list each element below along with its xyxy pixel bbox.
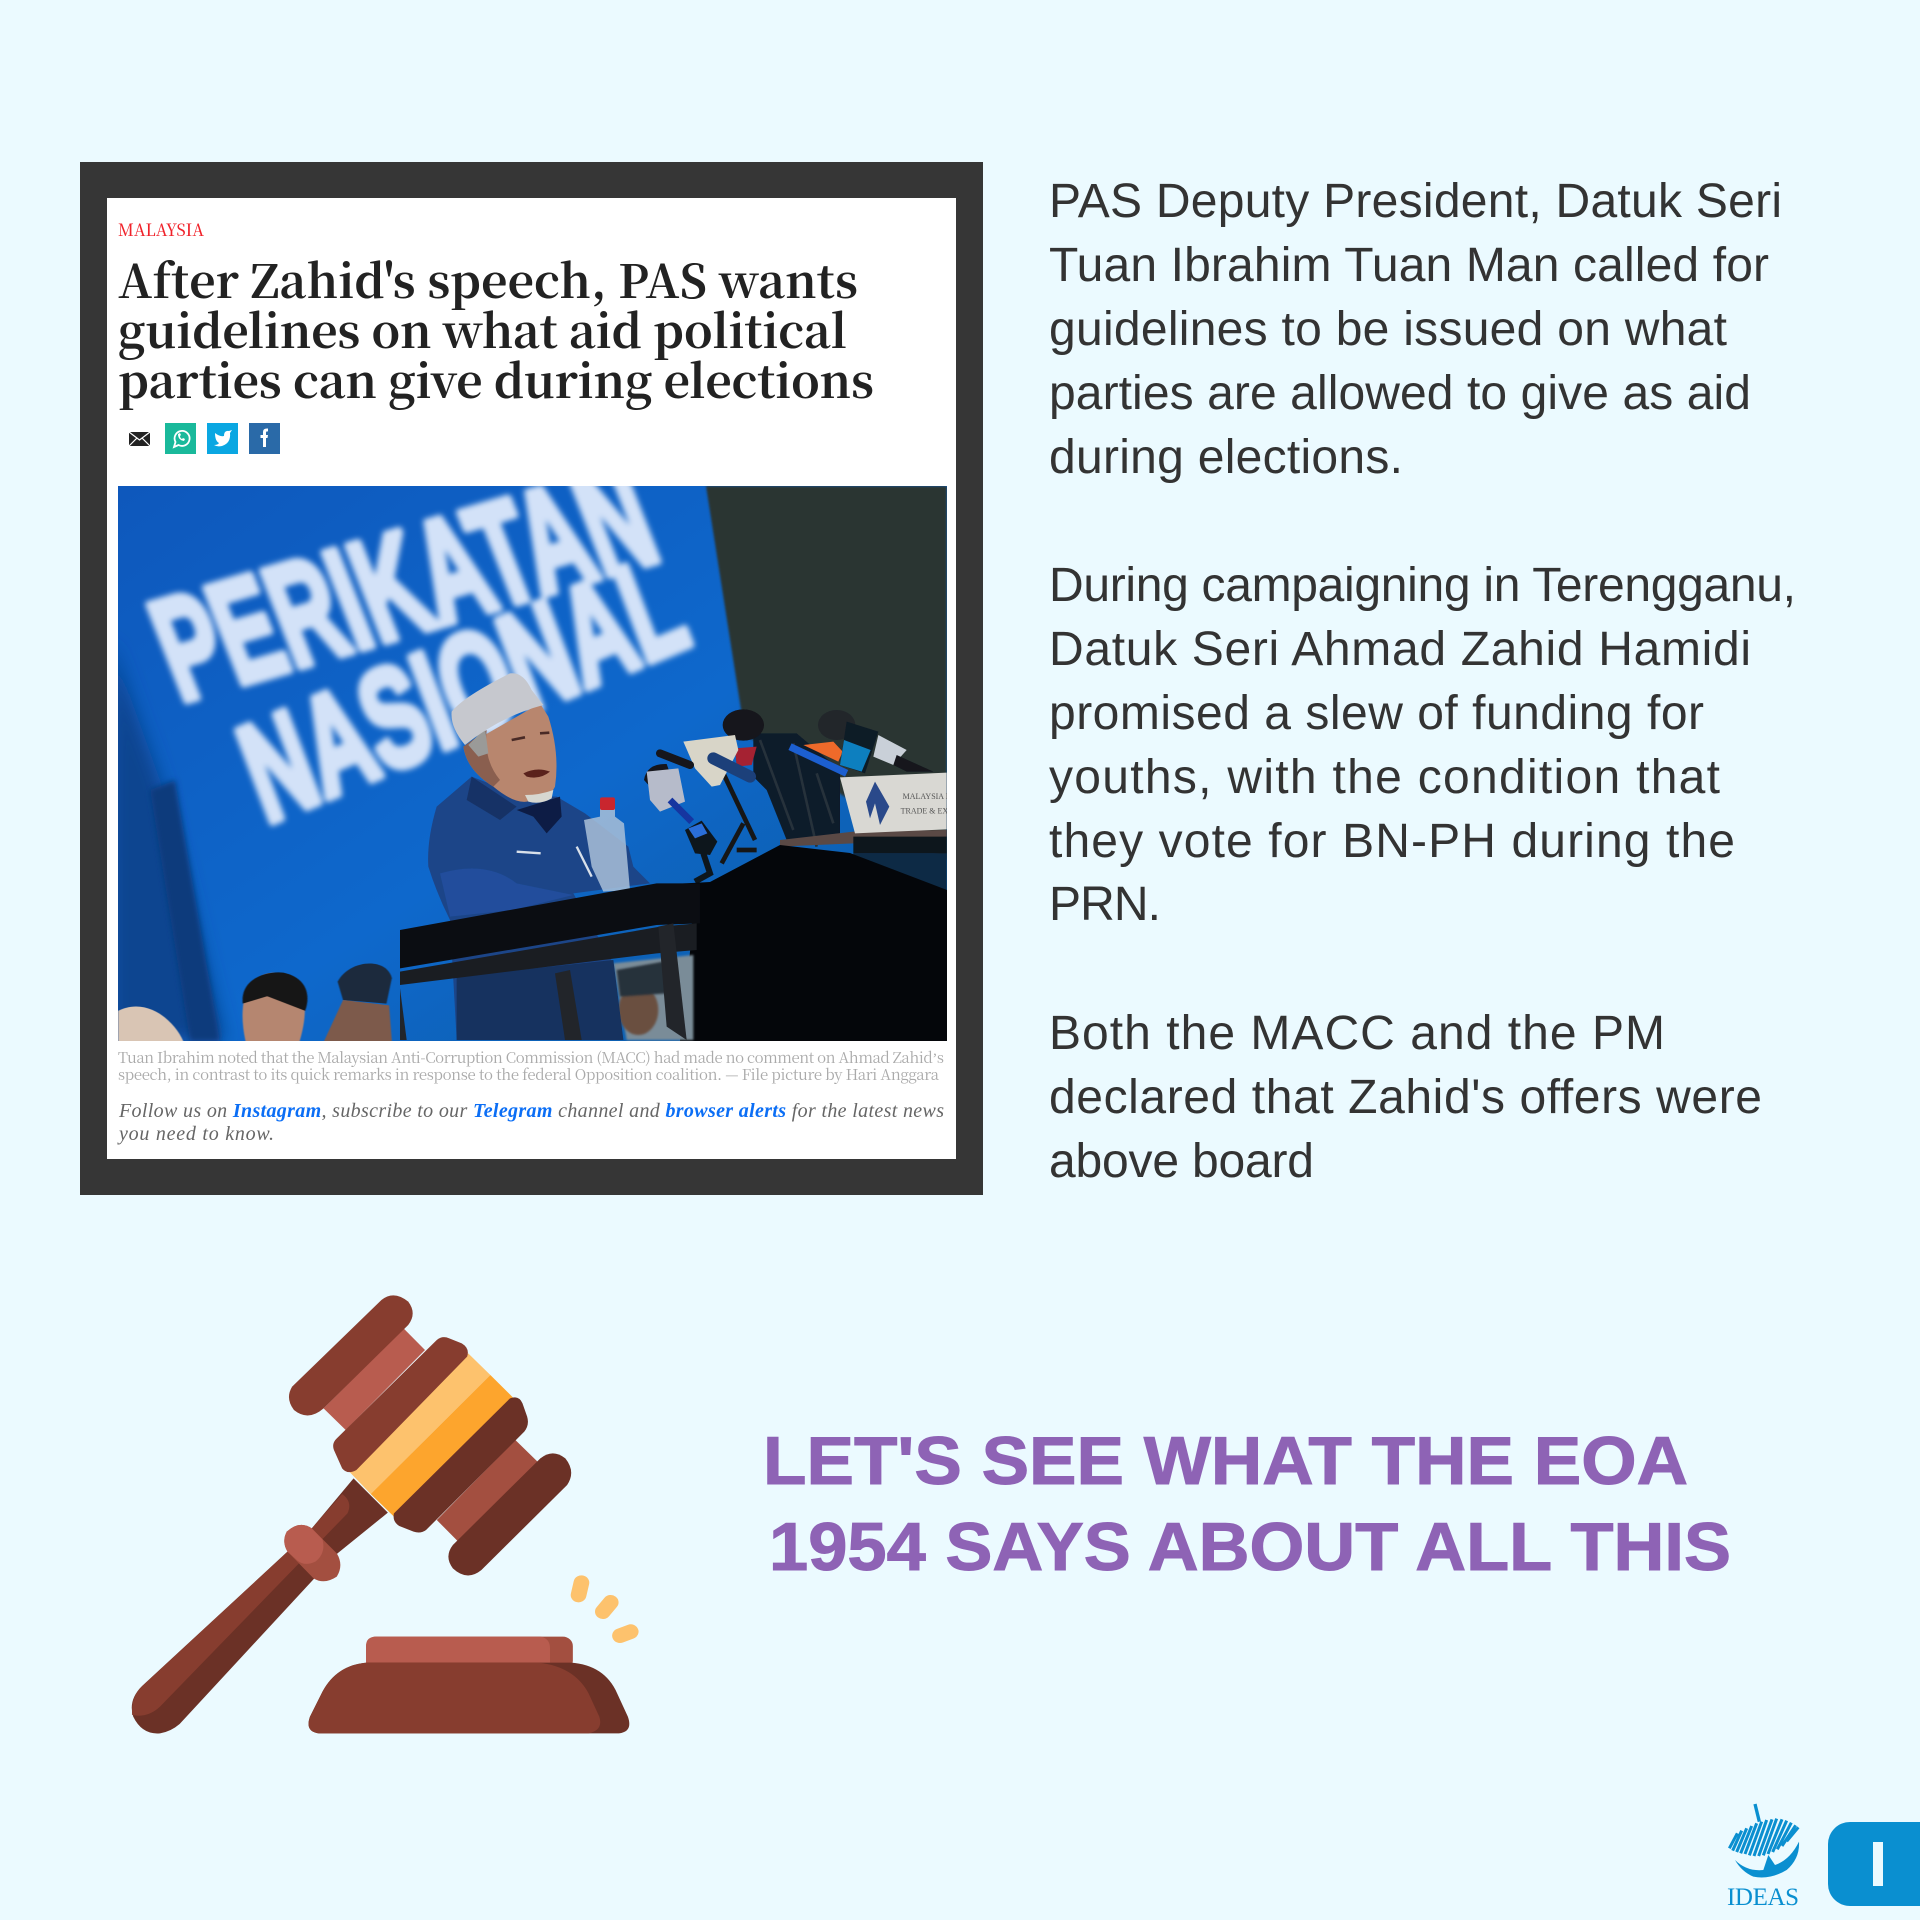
text block: Zahid campaign promises: they vote for BN-PH during the <box>1049 815 1735 868</box>
sound block <box>309 1637 629 1733</box>
text block: Tuan Ibrahim call for guidelines: during elections. <box>1049 431 1403 484</box>
microphones and name sign <box>644 709 970 893</box>
lectern table <box>400 883 700 1040</box>
panel: news article screenshot <box>80 162 983 1195</box>
article headline: guidelines on what aid political <box>118 296 847 362</box>
text block: Zahid campaign promises: During campaigning in Terengganu, <box>1049 559 1796 612</box>
call to action heading <box>763 1423 1731 1585</box>
follow us note <box>117 1100 944 1145</box>
microphones and name sign: TRADE & EXHIBIT <box>901 806 970 815</box>
text block: MACC and PM response: above board <box>1049 1135 1314 1188</box>
IDEAS logo <box>1727 1804 1799 1911</box>
call to action heading: LET'S SEE WHAT THE EOA <box>763 1423 1688 1499</box>
article category: MALAYSIA <box>118 216 205 241</box>
follow us note: you need to know. <box>117 1123 274 1145</box>
stage backdrop wording <box>141 486 698 830</box>
gavel head <box>289 1295 571 1575</box>
text block: MACC and PM response: declared that Zahid's offers were <box>1049 1071 1762 1124</box>
share icons <box>129 423 280 454</box>
text block: Zahid campaign promises <box>1049 559 1796 931</box>
handle collar <box>284 1525 340 1581</box>
text block: Zahid campaign promises: Datuk Seri Ahmad Zahid Hamidi <box>1049 623 1751 676</box>
speaker <box>428 673 650 1040</box>
article photo: speaker at podium <box>118 486 947 1041</box>
article headline: After Zahid's speech, PAS wants <box>118 246 858 312</box>
microphones and name sign: MALAYSIA INTER <box>903 792 970 801</box>
podium black front <box>655 845 947 1041</box>
call to action heading: 1954 SAYS ABOUT ALL THIS <box>769 1509 1731 1585</box>
photo caption: Tuan Ibrahim noted that the Malaysian Anti-Corruption Commission (MACC) had made no comment on Ahmad Zahid’s <box>118 1047 944 1068</box>
text block: Zahid campaign promises: youths, with the condition that <box>1049 751 1720 804</box>
article headline <box>118 246 874 412</box>
logo wordmark: IDEAS <box>1727 1884 1799 1911</box>
stage backdrop wording: PERIKATAN <box>131 435 676 732</box>
text block: Tuan Ibrahim call for guidelines: guidelines to be issued on what <box>1049 303 1727 356</box>
text block: Zahid campaign promises: promised a slew of funding for <box>1049 687 1704 740</box>
text block: Tuan Ibrahim call for guidelines: Tuan Ibrahim Tuan Man called for <box>1049 239 1769 292</box>
article headline: parties can give during elections <box>118 346 874 412</box>
audience heads <box>118 963 392 1041</box>
photo caption: speech, in contrast to its quick remarks in response to the federal Opposition coalition. — File picture by Hari Anggara <box>118 1064 940 1085</box>
text block: Tuan Ibrahim call for guidelines <box>1049 175 1782 484</box>
speaker and lectern <box>400 673 700 1040</box>
text block: Tuan Ibrahim call for guidelines: parties are allowed to give as aid <box>1049 367 1751 420</box>
photo caption <box>118 1047 944 1085</box>
text block: MACC and PM response: Both the MACC and the PM <box>1049 1007 1665 1060</box>
gavel handle <box>132 1478 388 1733</box>
impact sparks <box>579 1583 631 1636</box>
stage backdrop wording: NASIONAL <box>221 524 704 852</box>
logo mark <box>1729 1804 1799 1877</box>
page number tab <box>1828 1822 1920 1906</box>
icon: gavel and sound block <box>132 1295 631 1733</box>
text block: Zahid campaign promises: PRN. <box>1049 878 1161 931</box>
text block: Tuan Ibrahim call for guidelines: PAS Deputy President, Datuk Seri <box>1049 175 1782 228</box>
text block: MACC and PM response <box>1049 1007 1762 1188</box>
follow us note: Follow us on Instagram, subscribe to our Telegram channel and browser alerts for the latest news <box>118 1100 944 1122</box>
